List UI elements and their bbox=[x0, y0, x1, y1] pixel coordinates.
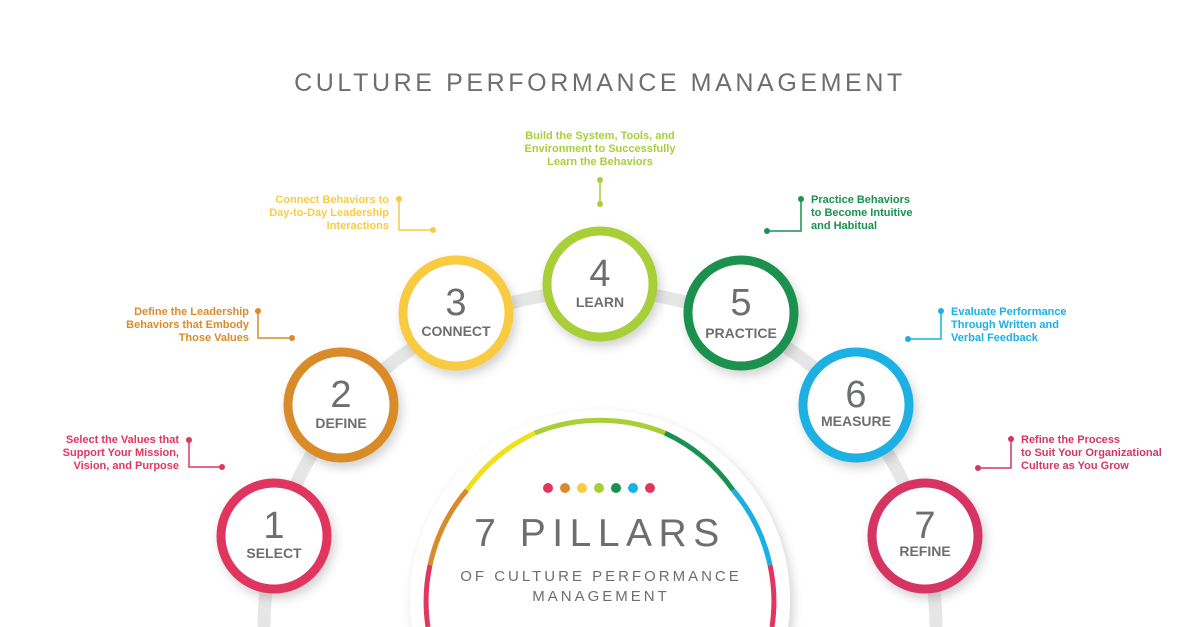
callout 6: Evaluate Performance bbox=[951, 306, 1067, 318]
callout 4: Build the System, Tools, and bbox=[525, 130, 675, 142]
callout 7: Refine the Process bbox=[1021, 434, 1120, 446]
pillar 7 bbox=[872, 483, 978, 589]
callout 5: Practice Behaviors bbox=[811, 194, 910, 206]
callout 7: to Suit Your Organizational bbox=[1021, 447, 1162, 459]
center heading: 7 PILLARS bbox=[474, 512, 726, 555]
pillar 3 bbox=[403, 260, 509, 366]
pillar 1: SELECT bbox=[246, 545, 302, 561]
callout 1: Vision, and Purpose bbox=[73, 460, 179, 472]
title: CULTURE PERFORMANCE MANAGEMENT bbox=[294, 69, 906, 97]
pillar 5: 5 bbox=[730, 282, 752, 324]
pillar 3: 3 bbox=[445, 282, 467, 324]
pillar 5: PRACTICE bbox=[705, 325, 777, 341]
pillar 6: 6 bbox=[845, 374, 867, 416]
pillar 7: 7 bbox=[914, 505, 936, 547]
callout 1 bbox=[63, 434, 225, 472]
callout 4 bbox=[525, 130, 676, 207]
pillar 4 bbox=[547, 231, 653, 337]
callout 3: Interactions bbox=[327, 220, 389, 232]
callout 6: Verbal Feedback bbox=[951, 332, 1039, 344]
pillar 5 bbox=[688, 260, 794, 366]
callout 2: Define the Leadership bbox=[134, 306, 249, 318]
pillar 7: REFINE bbox=[899, 543, 951, 559]
pillar 2: DEFINE bbox=[315, 415, 367, 431]
pillar 6 bbox=[803, 352, 909, 458]
pillar 1 bbox=[221, 483, 327, 589]
callout 3: Connect Behaviors to bbox=[275, 194, 389, 206]
center circle: MANAGEMENT bbox=[532, 588, 670, 605]
callout 7 bbox=[975, 434, 1162, 472]
pillar 1: 1 bbox=[263, 505, 285, 547]
callout 2 bbox=[126, 306, 295, 344]
callout 6 bbox=[905, 306, 1067, 344]
gray track arc bbox=[264, 291, 936, 627]
callout 2: Those Values bbox=[179, 332, 249, 344]
pillar 2 bbox=[288, 352, 394, 458]
pillar 4: LEARN bbox=[576, 294, 624, 310]
color dots bbox=[543, 483, 655, 493]
pillar 6: MEASURE bbox=[821, 413, 891, 429]
callout 5: to Become Intuitive bbox=[811, 207, 912, 219]
callout 6: Through Written and bbox=[951, 319, 1059, 331]
callout 4: Environment to Successfully bbox=[525, 143, 676, 155]
callout 3: Day-to-Day Leadership bbox=[269, 207, 389, 219]
callout 7: Culture as You Grow bbox=[1021, 460, 1129, 472]
pillar 3: CONNECT bbox=[421, 323, 491, 339]
pillar 4: 4 bbox=[589, 253, 611, 295]
callout 3 bbox=[269, 194, 436, 233]
pillar 2: 2 bbox=[330, 374, 352, 416]
callout 4: Learn the Behaviors bbox=[547, 156, 653, 168]
center subheading: OF CULTURE PERFORMANCE bbox=[460, 568, 742, 585]
callout 1: Select the Values that bbox=[66, 434, 179, 446]
callout 5 bbox=[764, 194, 912, 234]
callout 1: Support Your Mission, bbox=[63, 447, 179, 459]
callout 2: Behaviors that Embody bbox=[126, 319, 250, 331]
center circle bbox=[410, 410, 790, 627]
callout 5: and Habitual bbox=[811, 220, 877, 232]
